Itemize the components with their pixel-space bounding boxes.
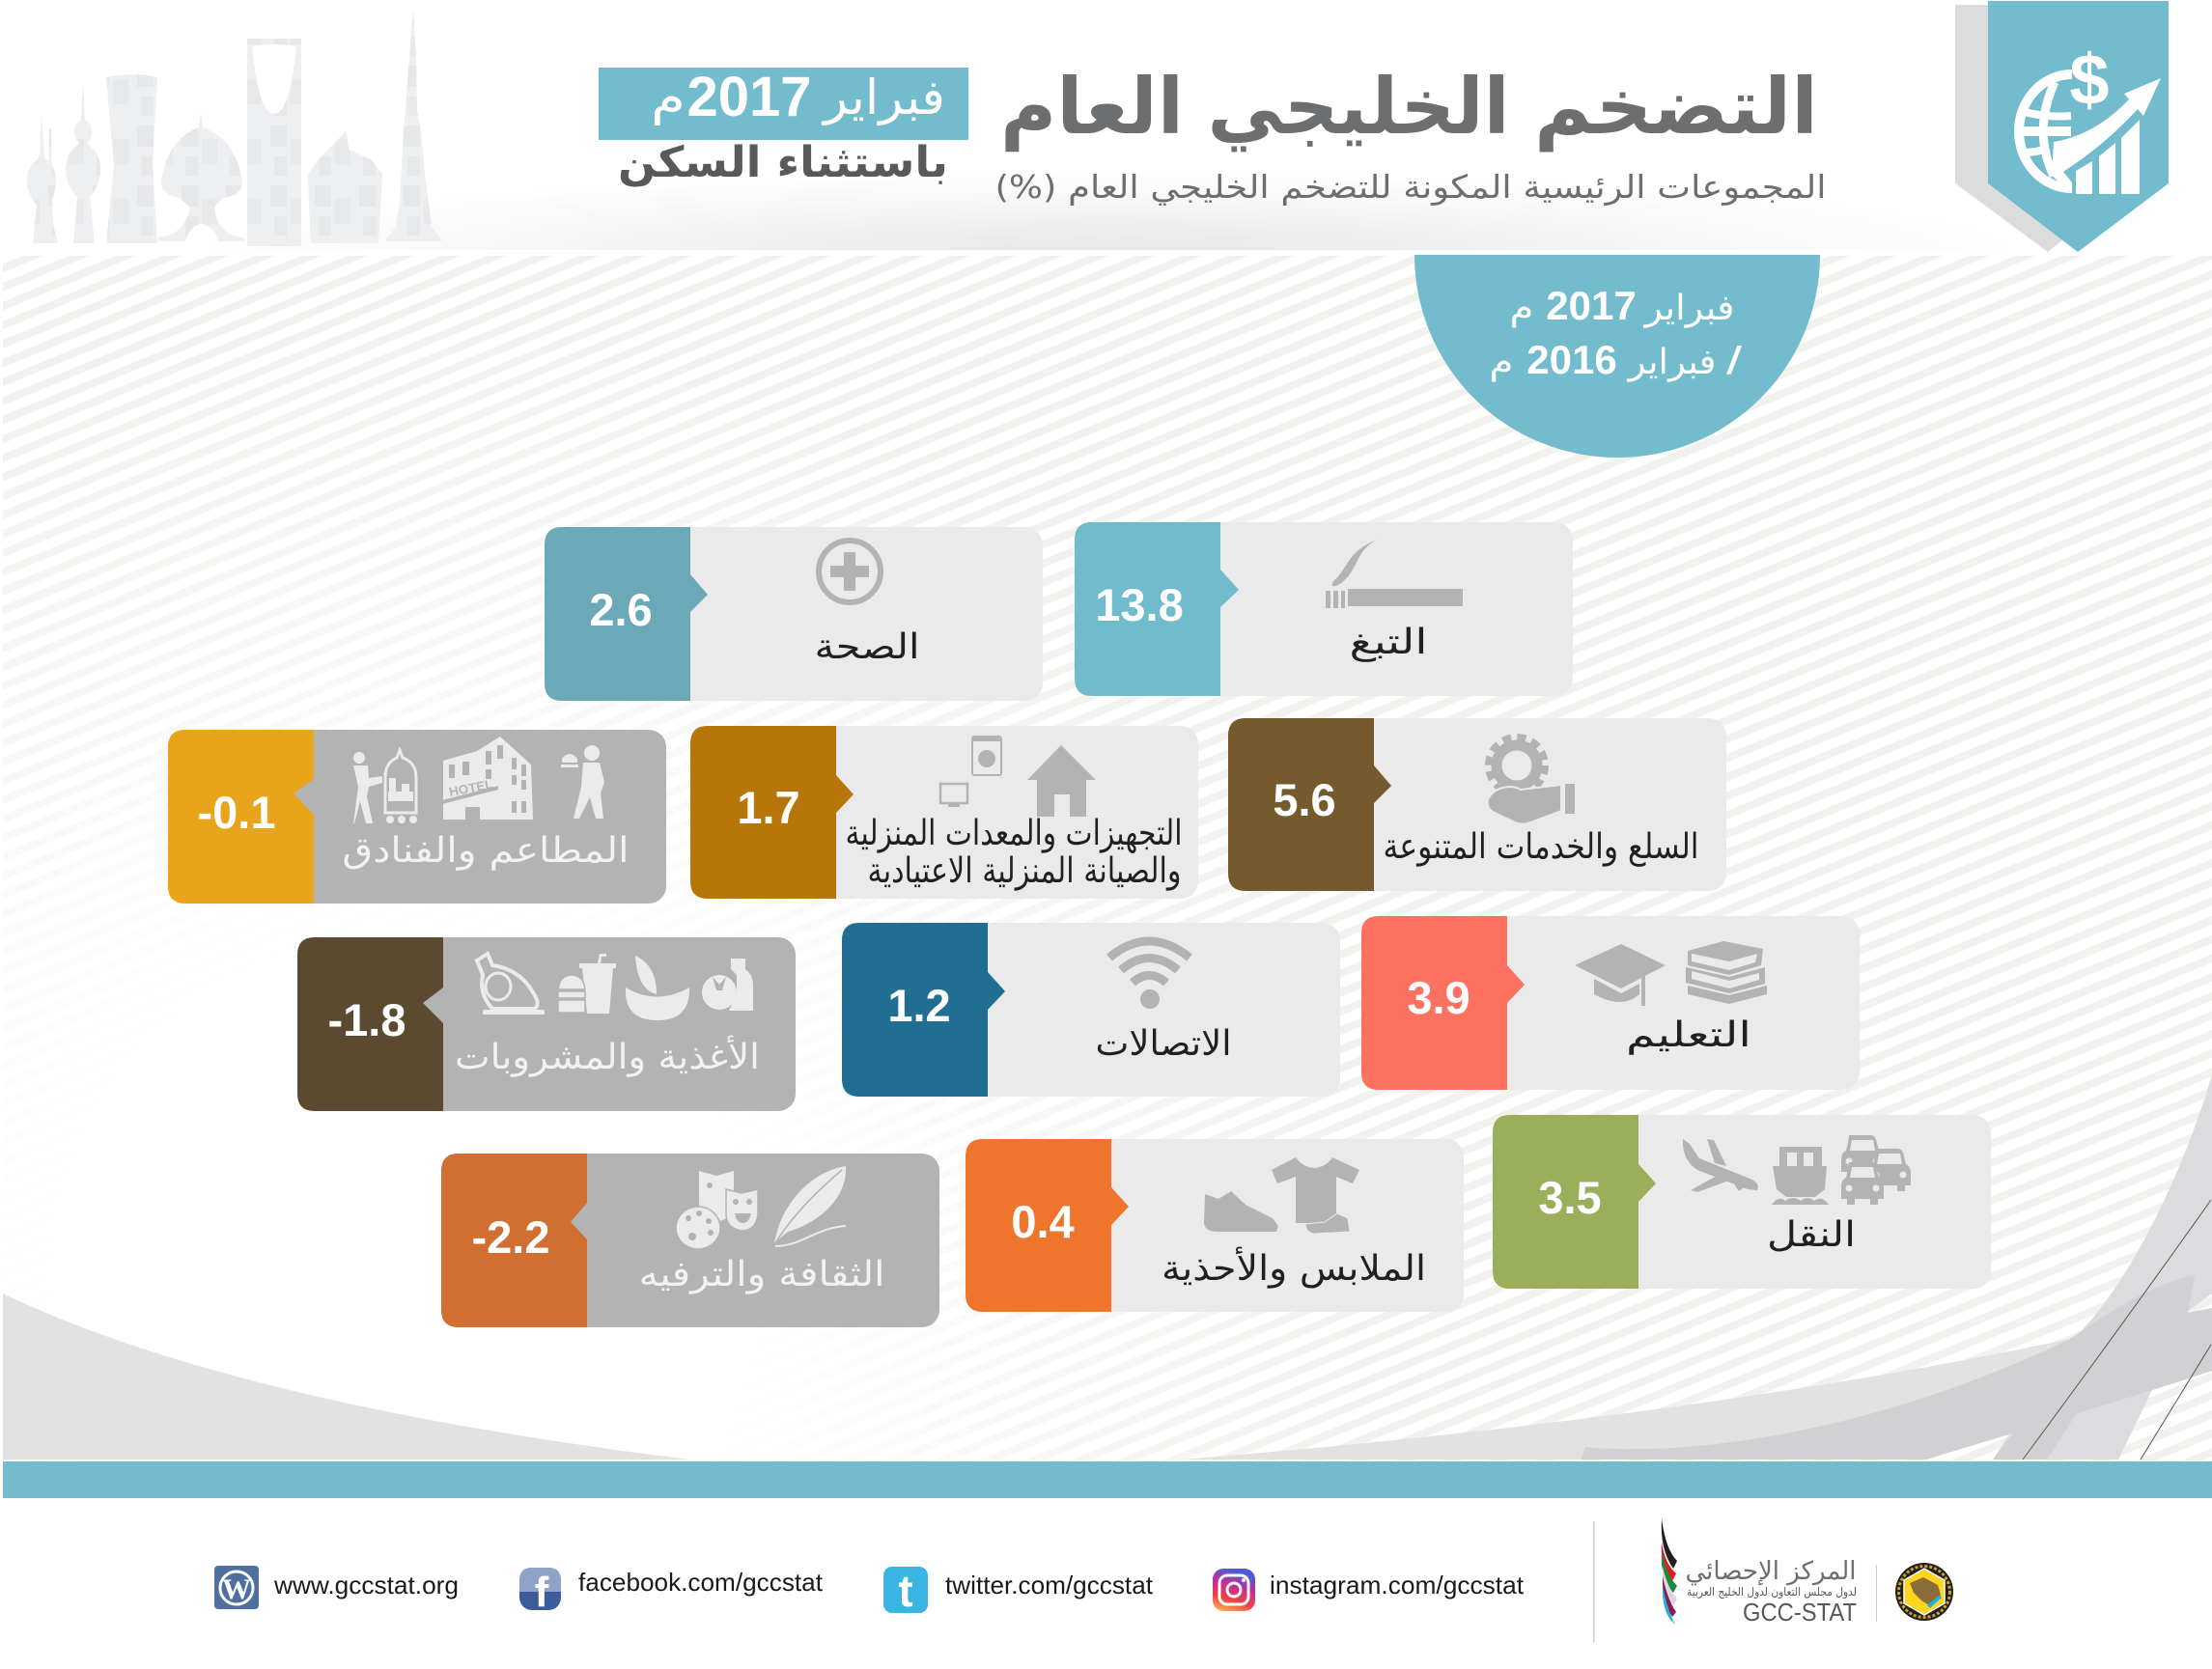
icon: theatre masks: [699, 1171, 758, 1231]
facebook link: [519, 1568, 824, 1616]
skyline illustration: [27, 10, 442, 246]
icon: wifi signal: [1109, 941, 1190, 1005]
icon: large shoe: [1204, 1191, 1278, 1232]
icon: washing machine: [972, 737, 1001, 775]
title: العام: [1000, 62, 1184, 153]
panel: culture and recreation: [441, 1154, 939, 1327]
logo: GCC-STAT: [1662, 1518, 1953, 1627]
icon: hotel building: HOTEL: [448, 776, 494, 799]
icon: twitter: [883, 1566, 928, 1616]
icon: graduation cap: [1575, 944, 1666, 1006]
icon: facebook: [519, 1568, 561, 1616]
icon: shield with globe and rising arrow: [1955, 1, 2169, 252]
panel: restaurants and hotels: المطاعم والفنادق: [342, 831, 630, 871]
icon: roast chicken: [477, 954, 545, 1015]
date banner: فبراير: [821, 70, 945, 125]
period semicircle: /: [1725, 340, 1742, 382]
title: [1000, 62, 1818, 153]
teal footer bar: [3, 1461, 2212, 1498]
icon: wordpress: [214, 1566, 259, 1609]
striped background: [3, 256, 2212, 1460]
panel: miscellaneous goods and services: [1228, 718, 1726, 891]
panel: health: [545, 527, 1043, 701]
icon: gear in hand: [1488, 737, 1575, 824]
panel: furnishings and household equipment: [690, 726, 1198, 899]
panel: culture and recreation: -2.2: [471, 1211, 550, 1263]
date banner: م: [651, 70, 686, 125]
panel: miscellaneous goods and services: السلع والخدمات المتنوعة: [1383, 827, 1699, 867]
panel: food and beverages: [297, 937, 796, 1111]
icon: medical cross: [819, 541, 881, 602]
period semicircle: م: [1489, 343, 1514, 382]
icon: burger and drink: [558, 954, 616, 1014]
title: التضخم: [1534, 62, 1818, 153]
icon: wordpress: W: [222, 1573, 251, 1605]
panel: miscellaneous goods and services: 5.6: [1273, 774, 1336, 825]
title: الخليجي: [1207, 62, 1510, 152]
panel: transport: 3.5: [1538, 1172, 1602, 1223]
icon: tomato and bottle: [702, 959, 753, 1011]
panel: furnishings and household equipment: 1.7: [737, 782, 800, 833]
period semicircle: 2017: [1546, 283, 1637, 328]
panel: food and beverages: الأغذية والمشروبات: [455, 1035, 760, 1077]
icon: facebook: f: [535, 1569, 549, 1616]
bottom left swoosh: [3, 1293, 690, 1460]
website link: [214, 1566, 459, 1609]
panel: health: 2.6: [589, 584, 653, 635]
panel: culture and recreation: الثقافة والترفيه: [639, 1255, 884, 1294]
panel: education: [1361, 916, 1860, 1090]
icon: instagram: [1213, 1569, 1255, 1611]
panel: transport: [1493, 1115, 1991, 1289]
twitter link: twitter.com/gccstat: [945, 1571, 1154, 1599]
icon: small shoe: [1305, 1213, 1350, 1234]
date banner: 2017: [686, 66, 812, 128]
icon: cars: [1841, 1135, 1911, 1205]
panel: transport: النقل: [1767, 1215, 1856, 1255]
icon: stack of books: [1686, 941, 1767, 1004]
twitter link: [883, 1566, 1154, 1616]
icon: cigarette: [1326, 540, 1463, 608]
icon: paint palette: [676, 1207, 720, 1249]
emblem: [1895, 1563, 1953, 1621]
panel: communications: [842, 923, 1340, 1097]
panel: clothing and footwear: [966, 1139, 1464, 1312]
logo: GCC-STAT: المركز الإحصائي: [1686, 1557, 1856, 1586]
icon: house: [1027, 745, 1096, 817]
icon: bellhop with cart: [353, 750, 417, 823]
icon: bowl and vegetables: [626, 956, 689, 1020]
period semicircle: فبراير: [1626, 343, 1717, 382]
icon: ship: [1772, 1147, 1829, 1205]
panel: communications: الاتصالات: [1095, 1024, 1232, 1064]
icon: television: [940, 784, 967, 807]
icon: shield with globe and rising arrow: $: [2069, 40, 2110, 120]
panel: tobacco: التبغ: [1350, 623, 1427, 662]
panel: clothing and footwear: 0.4: [1011, 1196, 1075, 1247]
panel: clothing and footwear: الملابس والأحذية: [1162, 1246, 1426, 1289]
icon: shirt: [1272, 1157, 1359, 1223]
instagram link: instagram.com/gccstat: [1270, 1571, 1525, 1599]
panel: education: التعليم: [1626, 1015, 1751, 1055]
period semicircle: [1414, 255, 1820, 458]
facebook link: facebook.com/gccstat: [578, 1568, 824, 1597]
panel: furnishings and household equipment: والصيانة المنزلية الاعتيادية: [867, 851, 1182, 891]
header background: [0, 0, 2212, 250]
icon: airplane: [1683, 1139, 1758, 1192]
ribbon mark: [1662, 1518, 1677, 1625]
icon: feather quill: [774, 1166, 846, 1246]
website link: www.gccstat.org: [273, 1571, 459, 1599]
date banner: [599, 66, 968, 140]
panel: furnishings and household equipment: التجهيزات والمعدات المنزلية: [846, 814, 1182, 853]
period semicircle: 2016: [1526, 337, 1617, 382]
panel: food and beverages: -1.8: [328, 994, 406, 1045]
icon: twitter: t: [898, 1566, 913, 1616]
logo: GCC-STAT: GCC-STAT: [1743, 1598, 1857, 1627]
panel: communications: 1.2: [887, 980, 951, 1031]
subtitle: المجموعات الرئيسية المكونة للتضخم الخليجي العام (%): [994, 168, 1827, 206]
panel: restaurants and hotels: [168, 730, 666, 904]
icon: hotel building: [438, 737, 533, 820]
period semicircle: م: [1510, 289, 1533, 328]
heading: excluding housing: باستثناء السكن: [618, 138, 948, 187]
bottom right swoosh: [1181, 1074, 2212, 1460]
period semicircle: فبراير: [1642, 289, 1734, 328]
instagram link: [1213, 1569, 1525, 1611]
panel: health: الصحة: [815, 627, 919, 667]
logo: GCC-STAT: لدول مجلس التعاون لدول الخليج العربية: [1687, 1585, 1857, 1599]
panel: restaurants and hotels: -0.1: [197, 787, 276, 838]
icon: waiter with tray: [561, 745, 604, 819]
panel: education: 3.9: [1407, 972, 1470, 1023]
panel: tobacco: [1075, 522, 1573, 696]
panel: tobacco: 13.8: [1095, 579, 1184, 630]
